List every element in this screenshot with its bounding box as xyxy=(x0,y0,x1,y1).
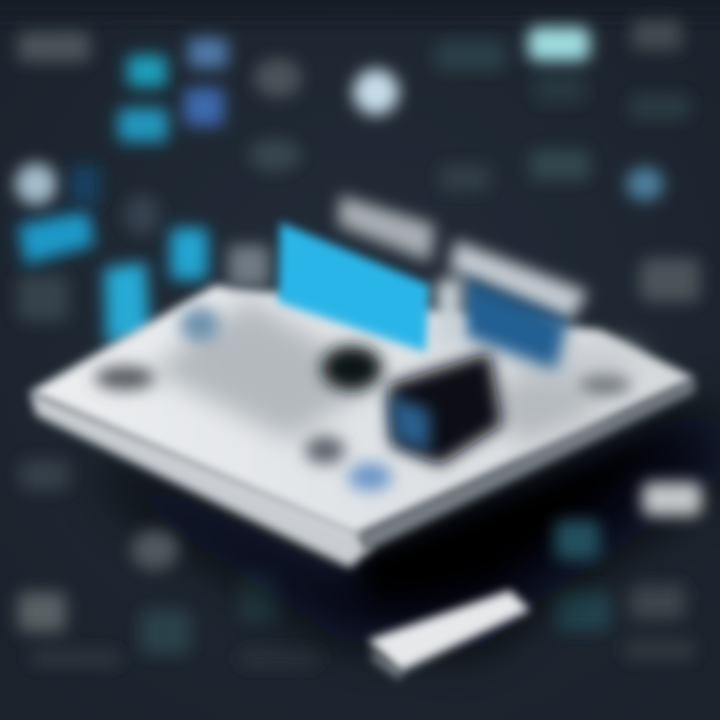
icon: bright teal tile top right xyxy=(528,27,590,61)
background icon: teal tile below platform xyxy=(555,520,600,560)
blue folder left xyxy=(18,210,95,265)
blue phone left xyxy=(104,262,150,345)
icon: white tile lower right xyxy=(642,482,702,516)
monitor stand shadow xyxy=(322,346,382,390)
background icon: grey circle below platform xyxy=(131,530,179,570)
platform shading xyxy=(150,300,640,445)
dark blue accent left xyxy=(70,165,100,205)
remote body xyxy=(368,590,530,672)
platform top xyxy=(30,285,695,535)
blue cube face xyxy=(390,395,430,452)
keyboard and pads on platform xyxy=(95,245,631,464)
right edge of platform xyxy=(360,380,695,552)
icon: pale tile left xyxy=(15,163,57,205)
monitor back panel xyxy=(338,195,435,262)
second laptop xyxy=(436,240,588,370)
icon: blue tile right xyxy=(626,167,664,201)
main blue monitor xyxy=(278,222,430,390)
white remote lower right xyxy=(368,590,530,680)
platform side xyxy=(30,392,372,568)
top band xyxy=(0,0,720,18)
monitor screen xyxy=(278,222,430,352)
blue tile centre left xyxy=(170,228,208,280)
dark core under platform xyxy=(350,420,690,605)
remote edge xyxy=(372,650,402,680)
icon: blue chip on platform edge xyxy=(348,463,392,491)
icon: cloud circle xyxy=(353,69,399,115)
black server cube xyxy=(388,352,502,465)
laptop lid xyxy=(450,240,588,322)
blue tiles group top left xyxy=(118,38,228,142)
platform shadow xyxy=(90,400,720,650)
laptop bezel xyxy=(436,276,462,350)
laptop screen xyxy=(462,278,568,370)
